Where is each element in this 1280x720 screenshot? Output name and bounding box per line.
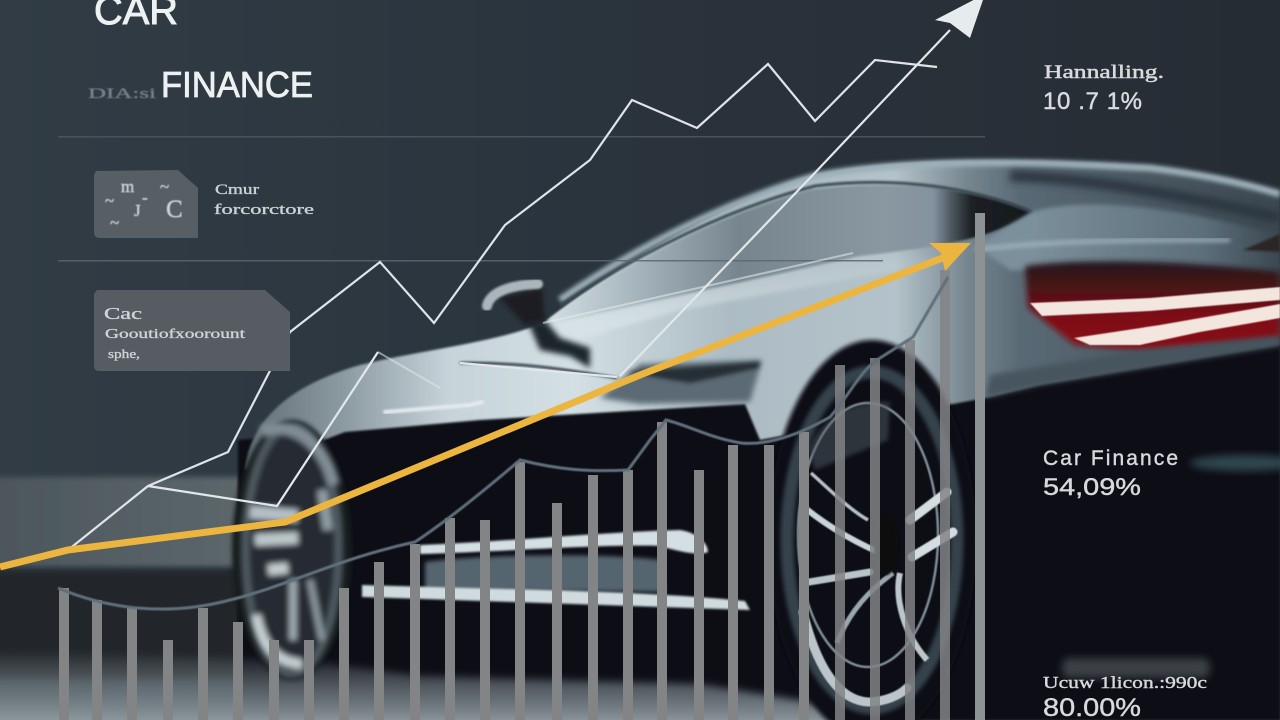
faint window line: [543, 253, 853, 323]
sill dark top: [625, 362, 760, 383]
caption: first card: [214, 182, 315, 218]
rear dark crease: [1010, 176, 1280, 218]
white trend line two: [148, 30, 950, 506]
card glyphs: ~: [105, 191, 114, 210]
bar chart: [59, 213, 985, 720]
car underside shadow: [238, 340, 1280, 720]
stat: top right: [1043, 62, 1164, 115]
panel: text card: [94, 290, 290, 371]
stat: top right: 10 .7 1%: [1043, 88, 1142, 115]
side sill shadow: [600, 360, 762, 404]
yellow trend arrow: [0, 243, 971, 567]
car body: [245, 160, 1280, 470]
card text: [104, 304, 245, 361]
card glyphs: C: [166, 196, 183, 223]
card text: Gooutiofxoorount: [105, 327, 245, 342]
stat: car finance: 54,09%: [1043, 474, 1141, 501]
front wheel: [245, 426, 339, 674]
card glyphs: J: [134, 201, 141, 220]
tail lights: [1030, 287, 1280, 345]
rear lamp housing: [1025, 261, 1280, 350]
lower body reflection upper streak: [420, 530, 708, 554]
rear wheel: [787, 372, 957, 708]
stat: car finance: [1043, 447, 1178, 501]
car roof highlight: [560, 163, 1280, 300]
divider lower: [58, 260, 883, 262]
streak behind middle stat: [1190, 455, 1280, 471]
window lower reflection: [540, 243, 960, 350]
car illustration: [232, 160, 1280, 720]
card glyphs: m: [121, 177, 134, 196]
stat: bottom right: Ucuw 1licon.:990c: [1043, 673, 1208, 692]
rear corner wedge: [1243, 234, 1280, 252]
lower body reflection lens: [425, 555, 665, 592]
window edge dark: [560, 182, 1032, 306]
card text: sphe,: [108, 346, 140, 361]
pale trend segment on hood: [378, 352, 440, 388]
caption: first card: Cmur: [215, 182, 259, 198]
stat: bottom right: [1043, 673, 1208, 720]
rear wheel arch: [768, 340, 976, 720]
car hood crease: [460, 363, 617, 378]
divider upper: [58, 136, 985, 138]
lower body reflection lower streak: [362, 585, 750, 610]
rear body lower band: [985, 336, 1280, 398]
caption: first card: forcorctore: [214, 202, 315, 218]
rear quarter panel: [975, 204, 1280, 272]
shoulder highlight: [975, 240, 1230, 250]
background band: dark floor left: [0, 570, 260, 680]
trend curve grey: [58, 277, 948, 609]
card text: Cac: [104, 304, 143, 323]
title prefix: DIA:si: [88, 86, 156, 102]
mirror: [487, 284, 590, 368]
stat: top right: Hannalling.: [1044, 62, 1164, 83]
front wheel arch: [232, 420, 352, 680]
stat: car finance: Car Finance: [1043, 447, 1178, 470]
white trend line one: [68, 60, 937, 550]
door handle: [385, 402, 482, 412]
car window: [545, 185, 1032, 326]
title: finance: FINANCE: [161, 64, 313, 105]
floor reflection band: [0, 650, 860, 720]
card glyphs: -: [142, 188, 148, 207]
white arrow head: [935, 0, 985, 38]
streak behind bottom stat: [1062, 658, 1210, 678]
card glyphs: ~: [110, 213, 119, 232]
card glyphs: ~: [160, 177, 169, 196]
background band: left grey strip: [0, 477, 242, 567]
panel: icon card: [94, 170, 198, 238]
